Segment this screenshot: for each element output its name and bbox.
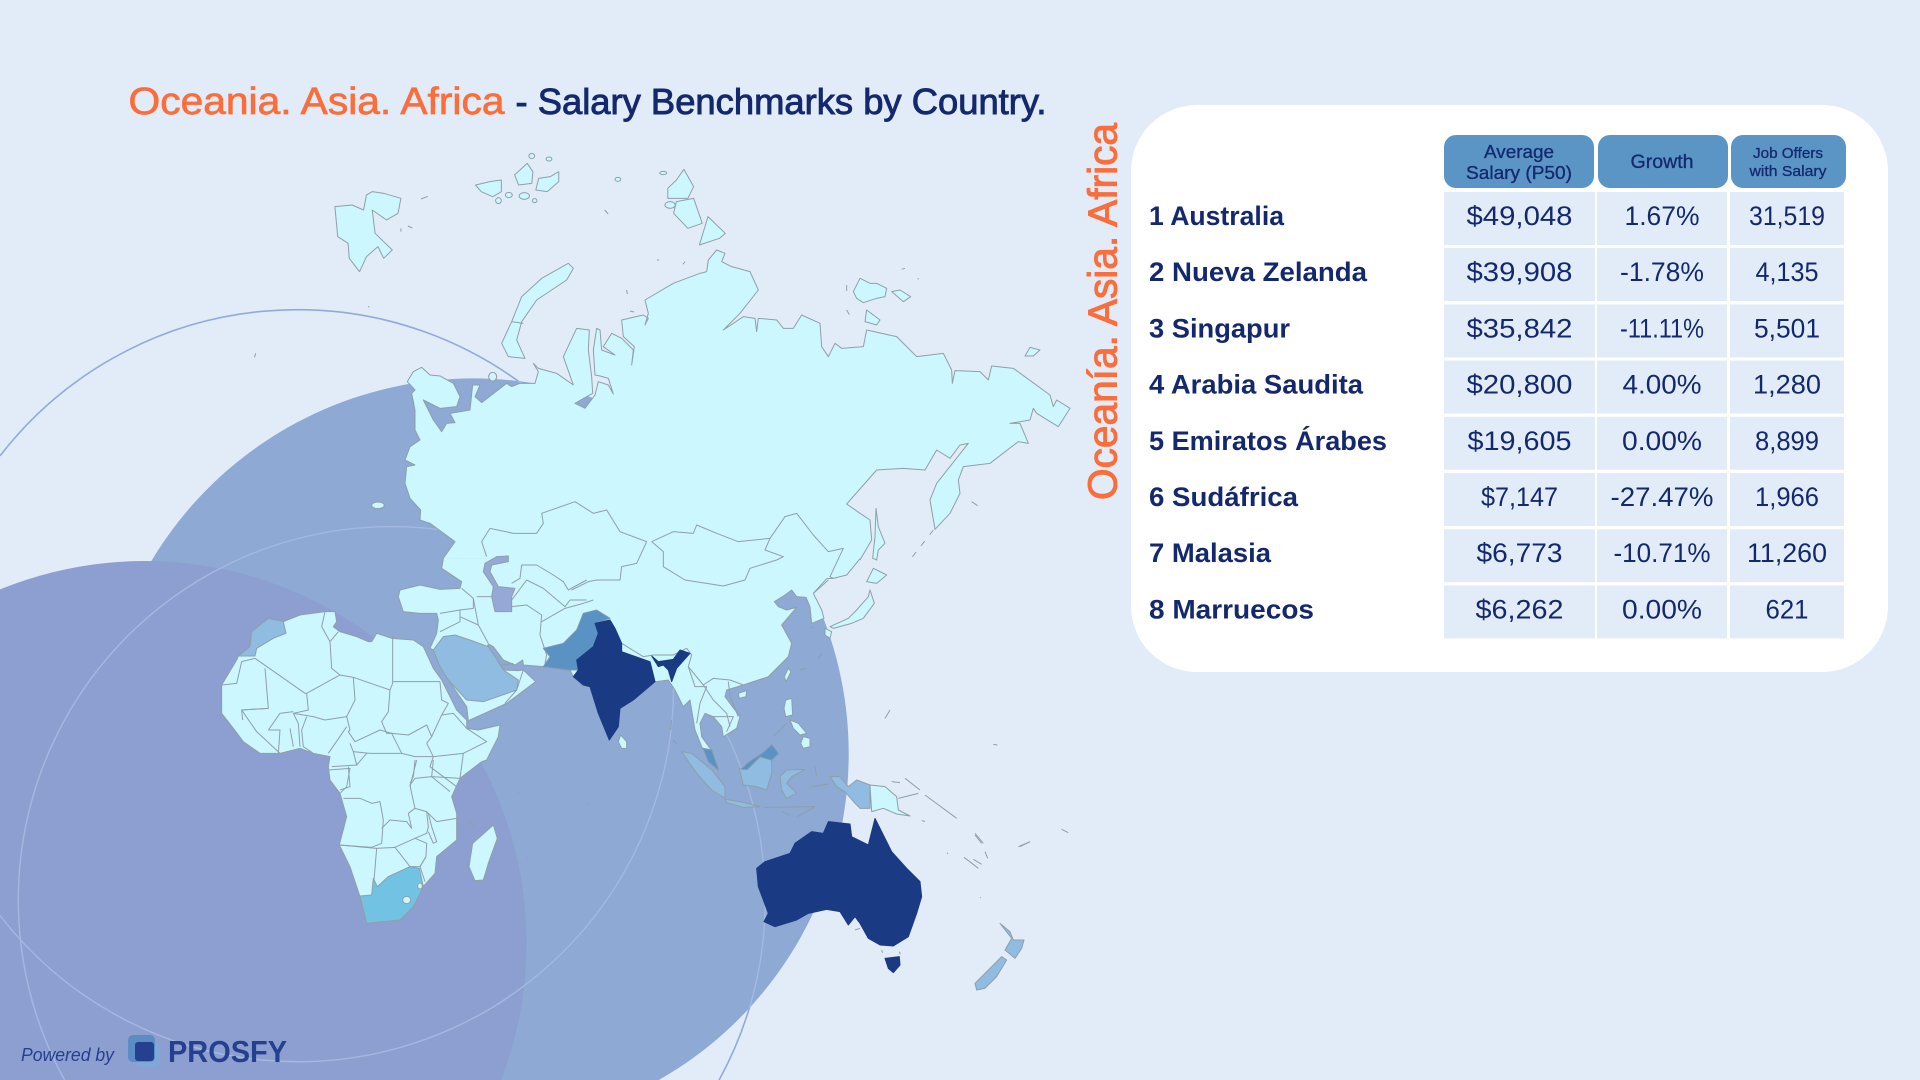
row 2 Nueva Zelanda: -1.78% xyxy=(1620,257,1704,287)
row 5 Emiratos Arabes: 8,899 xyxy=(1755,426,1819,456)
Pakistan xyxy=(543,610,610,670)
small Arctic islets xyxy=(255,196,608,357)
vertical region heading: Oceanía. Asia. Africa xyxy=(1080,123,1126,500)
Kolguev Island xyxy=(489,372,497,381)
row 7 Malasia: 7 Malasia xyxy=(1149,538,1272,568)
Tasmania xyxy=(885,957,900,973)
row 5 Emiratos Arabes: $19,605 xyxy=(1468,426,1572,456)
row 3 Singapur: 3 Singapur xyxy=(1149,313,1290,343)
table header xyxy=(1444,135,1846,188)
row 7 Malasia xyxy=(1149,529,1844,582)
row 6 Sudafrica: $7,147 xyxy=(1481,482,1558,512)
table header: Salary (P50) xyxy=(1466,163,1572,183)
title xyxy=(128,81,1046,123)
Morocco xyxy=(238,618,286,656)
Kalimantan xyxy=(739,757,772,790)
Sakhalin xyxy=(873,508,885,560)
row 4 Arabia Saudita: $20,800 xyxy=(1466,370,1572,400)
North and West Africa borders xyxy=(222,612,487,790)
southern Eurasia mainland xyxy=(398,559,860,768)
row 2 Nueva Zelanda: 4,135 xyxy=(1756,257,1818,287)
icon: Prosfy logo xyxy=(128,1035,160,1067)
row 7 Malasia: $6,773 xyxy=(1476,538,1562,568)
row 7 Malasia: -10.71% xyxy=(1614,538,1710,568)
Africa xyxy=(222,612,500,923)
table header: Average xyxy=(1484,142,1554,162)
South Africa xyxy=(360,867,423,923)
row 3 Singapur xyxy=(1149,304,1844,357)
North Africa map xyxy=(222,612,500,923)
row 6 Sudafrica xyxy=(1149,473,1844,526)
Saudi Arabia xyxy=(433,635,518,702)
Severnaya Zemlya xyxy=(615,169,725,245)
panel: salary table xyxy=(1131,105,1888,672)
Russia map xyxy=(405,250,1070,560)
row 8 Marruecos: $6,262 xyxy=(1476,594,1564,624)
Indonesian Papua xyxy=(830,777,870,808)
row 8 Marruecos: 621 xyxy=(1766,594,1808,624)
row 7 Malasia: 11,260 xyxy=(1747,538,1827,568)
Philippines xyxy=(784,698,810,748)
Java xyxy=(725,799,760,807)
Hainan xyxy=(738,691,747,698)
row 3 Singapur: -11.11% xyxy=(1620,313,1704,343)
Russia and northern Eurasia xyxy=(405,250,1070,560)
Southeast Asia map xyxy=(671,568,1068,847)
row 4 Arabia Saudita: 1,280 xyxy=(1753,370,1821,400)
Wrangel Island xyxy=(1025,347,1040,356)
row 8 Marruecos: 8 Marruecos xyxy=(1149,594,1314,624)
Caspian Sea xyxy=(483,556,515,612)
Southern Africa borders xyxy=(328,760,460,895)
row 1 Australia: 1.67% xyxy=(1624,201,1700,231)
Asia map xyxy=(398,502,860,768)
row 1 Australia: $49,048 xyxy=(1466,201,1572,231)
Taiwan xyxy=(784,668,791,682)
Sri Lanka xyxy=(618,735,627,748)
title: dark part: - Salary Benchmarks by Country. xyxy=(516,81,1046,122)
table header: Job Offers xyxy=(1753,145,1823,162)
New Zealand xyxy=(975,923,1024,990)
small islands near Madagascar xyxy=(468,792,588,862)
Malaysia peninsula xyxy=(703,748,718,770)
row 5 Emiratos Arabes xyxy=(1149,417,1844,470)
high Arctic islands xyxy=(255,153,725,509)
row 8 Marruecos xyxy=(1149,585,1844,638)
Sulawesi xyxy=(780,769,805,798)
row 6 Sudafrica: 1,966 xyxy=(1755,482,1819,512)
row 5 Emiratos Arabes: 0.00% xyxy=(1622,426,1702,456)
row 1 Australia xyxy=(1149,192,1844,245)
Franz Josef Land xyxy=(476,153,559,204)
table header: with Salary xyxy=(1748,163,1827,180)
table header: Growth xyxy=(1630,152,1694,173)
Southern Africa map xyxy=(328,760,588,923)
Lesotho xyxy=(403,896,411,904)
Novaya Zemlya xyxy=(502,263,573,358)
row 2 Nueva Zelanda: $39,908 xyxy=(1466,257,1572,287)
Kuril islands xyxy=(910,530,933,560)
row 1 Australia: 1 Australia xyxy=(1149,201,1285,231)
title: orange part: Oceania. Asia. Africa xyxy=(128,81,505,123)
row 8 Marruecos: 0.00% xyxy=(1622,594,1702,624)
row 5 Emiratos Arabes: 5 Emiratos Árabes xyxy=(1149,425,1387,456)
small islands xyxy=(671,627,1068,847)
Northeast India xyxy=(652,650,690,682)
small island in the Pechora Sea xyxy=(372,502,384,509)
India xyxy=(573,620,655,740)
row 3 Singapur: $35,842 xyxy=(1466,313,1572,343)
row 6 Sudafrica: -27.47% xyxy=(1610,482,1714,512)
row 1 Australia: 31,519 xyxy=(1749,201,1825,231)
row 2 Nueva Zelanda: 2 Nueva Zelanda xyxy=(1149,257,1368,287)
brand name: PROSFY xyxy=(168,1034,287,1069)
Eswatini xyxy=(418,883,422,889)
row 4 Arabia Saudita: 4 Arabia Saudita xyxy=(1149,370,1364,400)
row 6 Sudafrica: 6 Sudáfrica xyxy=(1149,482,1299,512)
Oceania map xyxy=(757,818,1030,990)
Madagascar xyxy=(469,825,497,881)
row 3 Singapur: 5,501 xyxy=(1754,313,1820,343)
row 4 Arabia Saudita: 4.00% xyxy=(1622,370,1702,400)
map xyxy=(222,153,1070,990)
Pacific islands xyxy=(855,835,1030,954)
Papua New Guinea xyxy=(870,785,910,816)
Japan xyxy=(825,568,887,638)
New Siberian Islands xyxy=(853,278,911,325)
row 2 Nueva Zelanda xyxy=(1149,248,1844,301)
Malaysian Borneo xyxy=(742,745,778,769)
row 4 Arabia Saudita xyxy=(1149,361,1844,414)
footer: powered by Prosfy xyxy=(21,1034,287,1069)
decorative circles xyxy=(0,310,849,1080)
Svalbard xyxy=(335,192,401,272)
powered by label: Powered by xyxy=(21,1045,115,1065)
Asia country borders xyxy=(440,502,843,732)
white card xyxy=(1131,105,1888,672)
small northern islets xyxy=(512,259,978,506)
Sumatra xyxy=(682,752,725,798)
Australia xyxy=(757,818,922,946)
